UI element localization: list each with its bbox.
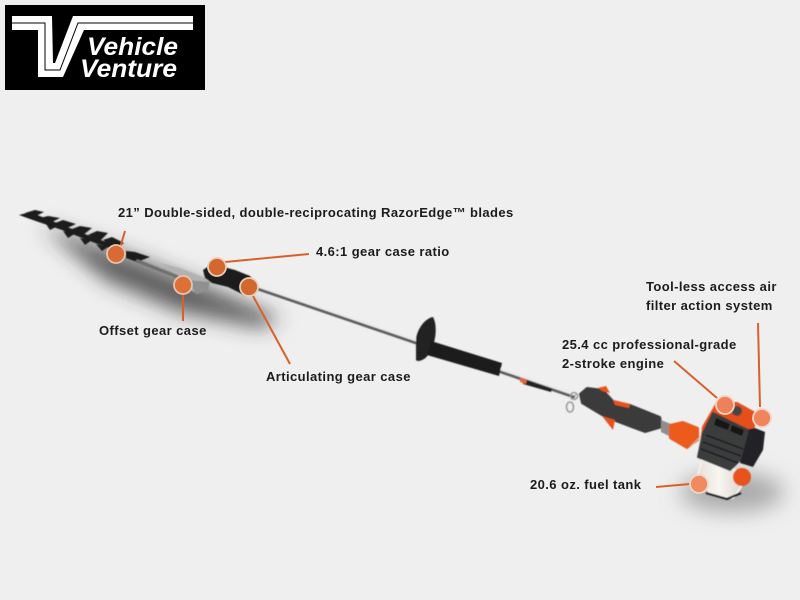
callout: engine [562, 337, 737, 414]
offset gear case [160, 263, 208, 293]
engine dark housing [698, 413, 748, 470]
blade [19, 210, 150, 262]
callout: fuel tank [530, 475, 708, 493]
callout: offset gear case [99, 276, 207, 338]
throttle handle [580, 388, 662, 432]
tank frame [706, 493, 741, 499]
blade bar [135, 259, 192, 284]
orange engine cover [700, 403, 755, 455]
orange gear housing [670, 422, 698, 448]
shadow under blade and gear cases [42, 226, 280, 328]
hedge trimmer [19, 210, 765, 499]
hand guard [416, 317, 436, 361]
callout: air filter: Tool-less access air [646, 279, 777, 294]
shaft logo [523, 379, 552, 392]
logo: Vehicle Venture: Vehicle [87, 33, 178, 61]
foam grip [427, 341, 502, 376]
callout: engine: 25.4 cc professional-grade [562, 337, 737, 352]
callout: articulating gear case: Articulating gear case [266, 369, 411, 384]
callout: gear case ratio [208, 244, 450, 276]
fuel tank [697, 460, 741, 498]
engine connector [661, 420, 671, 437]
knob [732, 406, 742, 416]
logo: Vehicle Venture [5, 5, 205, 90]
callout: gear case ratio: 4.6:1 gear case ratio [316, 244, 450, 259]
dark side housing [740, 428, 765, 467]
callout: engine: 2-stroke engine [562, 356, 664, 371]
callout: 21 inch blades: 21” Double-sided, double-reciprocating RazorEdge™ blades [118, 205, 514, 220]
callout: articulating gear case [240, 278, 411, 384]
callout: air filter [646, 279, 777, 427]
gear case housing [203, 264, 258, 296]
thin engine hose [690, 432, 705, 447]
shadow under engine [680, 472, 784, 512]
shaft [250, 286, 575, 396]
callout: offset gear case: Offset gear case [99, 323, 207, 338]
callout: air filter: filter action system [646, 298, 773, 313]
callout: fuel tank: 20.6 oz. fuel tank [530, 477, 642, 492]
callout: 21 inch blades [107, 205, 514, 263]
fuel cap [733, 468, 751, 486]
hanger ring [566, 392, 578, 412]
logo: Vehicle Venture: Venture [80, 55, 177, 83]
